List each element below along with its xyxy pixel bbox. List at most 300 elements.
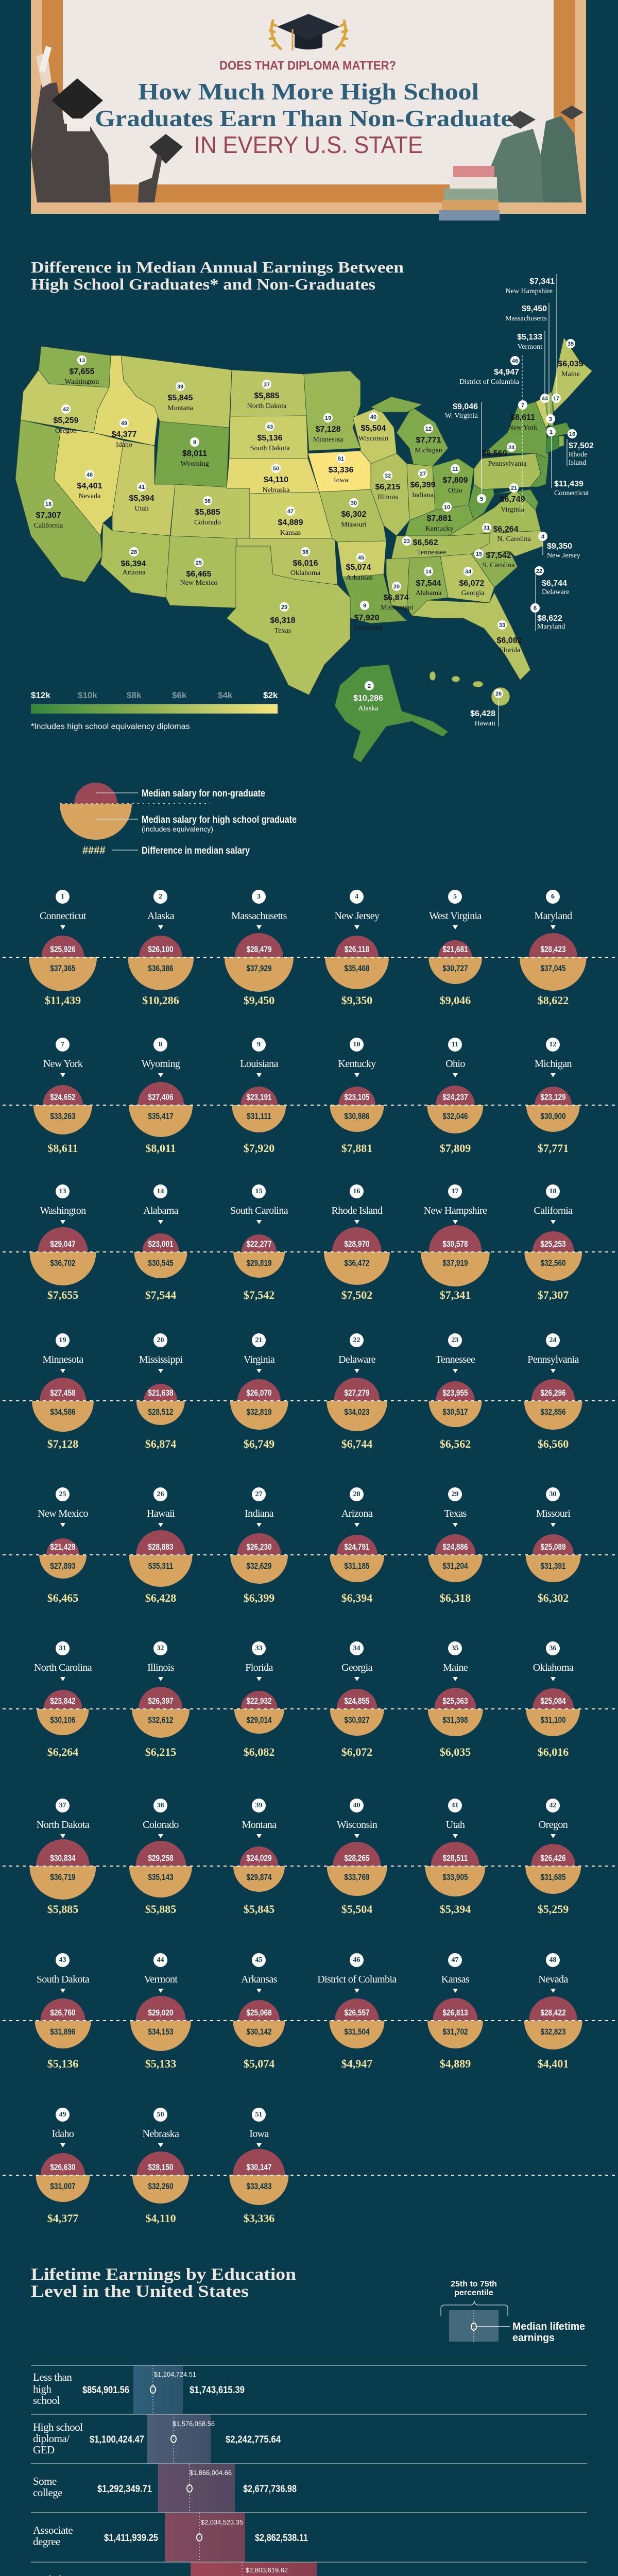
card: Maine: $6,035: [440, 1745, 471, 1758]
range value labels: $1,411,939.25: [104, 2533, 158, 2544]
state values and names on map: Louisiana: [354, 624, 383, 632]
card: Idaho: $26,630: [50, 2162, 76, 2172]
color scale legend: $12k: [31, 690, 50, 700]
map heading: High School Graduates* and Non-Graduates: [31, 275, 375, 293]
median value labels: $1,204,724.51: [154, 2370, 196, 2378]
state values and names on map: $4,110: [264, 476, 288, 484]
card: Delaware: 22: [353, 1336, 360, 1344]
card: Oklahoma: [504, 1637, 602, 1766]
card: Missouri: Missouri: [536, 1508, 570, 1519]
card: Louisiana: 9: [257, 1041, 261, 1048]
rank badges on map: 39: [177, 384, 183, 390]
education level row labels: school: [33, 2394, 60, 2406]
card: Connecticut: 1: [61, 893, 64, 901]
card: New Jersey: [325, 890, 389, 1007]
card: Pennsylvania: $32,856: [540, 1407, 566, 1417]
state values and names on map: Wisconsin: [358, 435, 388, 443]
rank badges on map: 47: [287, 509, 294, 515]
rank badges on map: 15: [476, 551, 482, 557]
card: Maine: [406, 1637, 504, 1766]
state values and names on map: $7,771: [416, 436, 441, 445]
card: Louisiana: $23,191: [246, 1092, 272, 1102]
card: West Virginia: $30,727: [442, 963, 468, 973]
card: Alaska: 2: [159, 893, 162, 901]
card: Washington: Washington: [40, 1205, 86, 1216]
median value labels: $1,576,058.56: [173, 2420, 215, 2428]
card: New York: $33,263: [50, 1111, 76, 1121]
card: Michigan: [526, 1038, 580, 1155]
card: South Carolina: 15: [255, 1188, 263, 1195]
rank badges on map: 12: [425, 426, 432, 432]
card: Michigan: $23,129: [540, 1092, 566, 1102]
state values and names on map: $6,215: [375, 483, 401, 492]
card: Iowa: $3,336: [244, 2212, 274, 2225]
rank badges on map: 14: [425, 569, 432, 575]
card: North Carolina: $23,842: [50, 1696, 76, 1706]
card: New Mexico: $6,465: [47, 1591, 78, 1604]
card: Maine: 35: [451, 1645, 458, 1652]
state values and names on map: $5,845: [168, 394, 193, 402]
card: Montana: Montana: [242, 1819, 276, 1831]
card: New Jersey: $26,118: [345, 944, 369, 954]
state values and names on map: $8,011: [182, 449, 207, 458]
rank badges on map: 16: [569, 431, 575, 437]
rank badges on map: 22: [536, 568, 542, 574]
rank badges on map: 50: [273, 466, 279, 472]
card: Louisiana: [232, 1038, 286, 1155]
card: Maryland: $8,622: [538, 994, 569, 1007]
card: Texas: $24,886: [442, 1542, 468, 1552]
card: Mississippi: $6,874: [145, 1437, 176, 1450]
card: Massachusetts: $37,929: [246, 963, 272, 973]
state values and names on map: $5,885: [254, 392, 280, 400]
state values and names on map: $8,611: [510, 413, 535, 422]
card: Wyoming: [129, 1038, 193, 1155]
card: Kentucky: $30,986: [344, 1111, 370, 1121]
card: Texas: 29: [451, 1490, 458, 1498]
state values and names on map: $7,920: [354, 614, 380, 622]
card: Indiana: Indiana: [245, 1508, 273, 1519]
card: Nevada: 48: [549, 1956, 556, 1964]
card: Iowa: [210, 2103, 308, 2232]
card: Wyoming: Wyoming: [142, 1058, 180, 1070]
card: Idaho: $4,377: [47, 2212, 78, 2225]
rank badges on map: 3: [549, 416, 552, 422]
card: Utah: Utah: [446, 1819, 465, 1831]
card: New York: $8,611: [47, 1142, 78, 1155]
card: Colorado: Colorado: [143, 1819, 179, 1831]
rank badges on map: 19: [325, 415, 331, 421]
rank badges on map: 29: [281, 604, 287, 611]
rank badges on map: 41: [139, 484, 145, 490]
median value labels: [154, 2370, 394, 2576]
map section: [15, 258, 594, 856]
card: Missouri: [525, 1487, 581, 1604]
card: New Mexico: 25: [59, 1490, 66, 1498]
card: Ohio: $24,237: [442, 1092, 468, 1102]
card: Delaware: $6,744: [341, 1437, 372, 1450]
card: Maryland: [519, 890, 587, 1007]
card: District of Columbia: $31,504: [344, 2027, 370, 2037]
card: California: California: [534, 1205, 573, 1216]
card: Tennessee: 23: [451, 1336, 458, 1344]
state values and names on map: $6,016: [293, 559, 318, 568]
card: Montana: [210, 1794, 308, 1923]
card: North Dakota: $5,885: [47, 1903, 78, 1916]
main title: How Much More High School: [138, 78, 479, 105]
rank badges on map: 45: [358, 555, 364, 561]
rank badges on map: 44: [542, 396, 548, 402]
card: California: $7,307: [538, 1289, 569, 1301]
color scale legend: [31, 690, 278, 714]
state values and names on map: Arizona: [122, 569, 146, 577]
state values and names on map: $5,394: [129, 494, 154, 503]
card: Colorado: $29,258: [148, 1853, 174, 1863]
card: Idaho: 49: [59, 2111, 66, 2119]
rank badges on map: 18: [45, 501, 52, 507]
card: South Carolina: [230, 1184, 288, 1301]
card: Delaware: [327, 1333, 387, 1450]
card: District of Columbia: $4,947: [341, 2057, 372, 2070]
state values and names on map: $7,881: [427, 514, 452, 523]
card: Arizona: [330, 1487, 384, 1604]
card: Florida: 33: [255, 1645, 263, 1652]
card: Idaho: [14, 2103, 112, 2232]
card: South Dakota: $31,896: [50, 2027, 76, 2037]
card: Arkansas: $5,074: [244, 2057, 274, 2070]
rank badges on map: 42: [63, 406, 69, 413]
state cards grid: row 5: [38, 1487, 581, 1604]
card: Vermont: $5,133: [145, 2057, 176, 2070]
card: California: $32,560: [540, 1258, 566, 1268]
card: Connecticut: $25,926: [50, 944, 76, 954]
card: Connecticut: Connecticut: [40, 910, 86, 922]
state values and names on map: N. Carolina: [497, 535, 531, 543]
card: Oklahoma: $6,016: [538, 1745, 569, 1758]
card: Missouri: $6,302: [538, 1591, 569, 1604]
card: Louisiana: Louisiana: [240, 1058, 278, 1070]
state values and names on map: $4,377: [112, 430, 137, 439]
card: Kentucky: [330, 1038, 384, 1155]
state values and names on map: Indiana: [412, 492, 434, 499]
state values and names on map: Illinois: [377, 494, 398, 501]
range value labels: $2,242,775.64: [226, 2434, 281, 2445]
card: Arizona: Arizona: [341, 1508, 372, 1519]
chart heading: Lifetime Earnings by Education: [31, 2265, 296, 2284]
card: Wyoming: 8: [159, 1041, 162, 1048]
card: District of Columbia: [308, 1948, 406, 2077]
card: North Dakota: $36,719: [50, 1872, 76, 1882]
state values and names on map: New York: [508, 424, 537, 432]
rank badges on map: 1: [550, 429, 553, 435]
card: Florida: $29,014: [246, 1715, 272, 1725]
callout labels: Alaska and small states: $10,286: [353, 694, 383, 703]
rank badges on map: 11: [452, 466, 458, 472]
card: Minnesota: $27,458: [50, 1388, 76, 1398]
callout leader lines: [482, 274, 567, 726]
state values and names on map: $6,264: [493, 525, 519, 534]
card: Colorado: 38: [157, 1802, 164, 1809]
card: North Carolina: $6,264: [47, 1745, 78, 1758]
card: Virginia: [230, 1333, 288, 1450]
state values and names on map: $6,874: [384, 594, 409, 602]
card: Washington: $29,047: [50, 1239, 76, 1249]
salary shape legend: (includes equivalency): [142, 825, 213, 833]
card: Indiana: $6,399: [244, 1591, 274, 1604]
card: Minnesota: $7,128: [47, 1437, 78, 1450]
salary shape legend: Median salary for high school graduate: [142, 815, 297, 825]
card: Texas: Texas: [444, 1508, 467, 1519]
state cards grid: row 8: [0, 1948, 618, 2077]
rank badges on map: 28: [131, 549, 137, 555]
rank badges on map: 9: [363, 603, 366, 609]
callout labels: Alaska and small states: Vermont: [518, 343, 542, 351]
rank badges on map: 13: [79, 358, 85, 364]
state values and names on map: Colorado: [194, 519, 221, 527]
card: California: $25,253: [540, 1239, 566, 1249]
callout labels: Alaska and small states: Connecticut: [554, 489, 589, 497]
card: South Dakota: South Dakota: [37, 1974, 89, 1985]
state values and names on map: $7,544: [416, 579, 441, 588]
callout labels: Alaska and small states: $9,450: [522, 304, 547, 313]
state cards grid: row 4: [32, 1333, 582, 1450]
card: Delaware: Delaware: [338, 1354, 375, 1365]
range value labels: $1,743,615.39: [190, 2385, 245, 2396]
card: Missouri: $31,391: [540, 1561, 566, 1571]
state values and names on map: [34, 360, 583, 654]
card: Ohio: [427, 1038, 483, 1155]
card: Rhode Island: $7,502: [341, 1289, 372, 1301]
salary shape legend: ####: [82, 845, 105, 856]
state values and names on map: New Mexico: [180, 579, 217, 587]
state cards grid: row 3: [30, 1184, 582, 1301]
state values and names on map: $5,504: [361, 424, 386, 433]
card: Mississippi: Mississippi: [139, 1354, 182, 1365]
card: Colorado: $5,885: [145, 1903, 176, 1916]
card: Massachusetts: Massachusetts: [231, 910, 287, 922]
state cards grid: row 6: [34, 1641, 580, 1758]
card: Georgia: Georgia: [341, 1662, 372, 1673]
callout labels: Alaska and small states: Maryland: [537, 623, 565, 631]
rank badges on map: 32: [385, 473, 391, 479]
rank badges on map: 40: [370, 414, 376, 420]
card: Virginia: Virginia: [244, 1354, 274, 1365]
choropleth map of US states: [15, 337, 592, 762]
card: Virginia: 21: [255, 1336, 263, 1344]
state values and names on map: Maine: [561, 370, 580, 378]
card: Illinois: $26,397: [148, 1696, 174, 1706]
education level row labels: Associate: [33, 2524, 73, 2536]
card: Hawaii: 26: [157, 1490, 164, 1498]
card: Maryland: $28,423: [540, 944, 566, 954]
card: Texas: $6,318: [440, 1591, 471, 1604]
card: Nebraska: $4,110: [145, 2212, 176, 2225]
card: Utah: 41: [451, 1802, 458, 1809]
state values and names on map: Michigan: [415, 447, 442, 454]
rank badges on map: 46: [512, 358, 518, 364]
card: Ohio: $7,809: [440, 1142, 471, 1155]
card: Hawaii: [129, 1487, 193, 1604]
callout labels: Alaska and small states: $9,046: [453, 402, 478, 411]
card: Washington: [30, 1184, 96, 1301]
card: West Virginia: $21,681: [442, 944, 468, 954]
card: Connecticut: [29, 890, 97, 1007]
card: Oklahoma: $25,084: [540, 1696, 566, 1706]
card: Pennsylvania: 24: [549, 1336, 556, 1344]
card: Montana: $29,874: [246, 1872, 272, 1882]
card: Oklahoma: Oklahoma: [533, 1662, 573, 1673]
card: Hawaii: $35,311: [148, 1561, 173, 1571]
card: District of Columbia: 46: [353, 1956, 360, 1964]
card: Iowa: Iowa: [249, 2128, 269, 2140]
card: Nevada: $32,823: [540, 2027, 566, 2037]
card: Wyoming: $27,406: [148, 1092, 174, 1102]
card: Massachusetts: [225, 890, 294, 1007]
card: Idaho: Idaho: [52, 2128, 74, 2140]
card: Minnesota: [32, 1333, 94, 1450]
range value labels: $1,292,349.71: [97, 2484, 152, 2495]
card: Mississippi: [136, 1333, 185, 1450]
card: Texas: $31,204: [442, 1561, 468, 1571]
state values and names on map: Missouri: [341, 521, 367, 529]
state values and names on map: $6,035: [558, 360, 583, 368]
card: Rhode Island: Rhode Island: [332, 1205, 382, 1216]
state cards grid: row 2: [33, 1038, 580, 1155]
state values and names on map: Mississippi: [381, 604, 414, 612]
card: Montana: 39: [255, 1802, 263, 1809]
card: Tennessee: $30,517: [442, 1407, 468, 1417]
card: Nebraska: $32,260: [148, 2181, 174, 2191]
state values and names on map: $4,889: [278, 518, 303, 527]
state values and names on map: Tennessee: [417, 549, 447, 556]
card: Hawaii: $6,428: [145, 1591, 176, 1604]
rank badges on map: 2: [368, 683, 371, 689]
card: Oregon: [504, 1794, 602, 1923]
state values and names on map: $5,885: [195, 508, 220, 517]
card: Delaware: $27,279: [344, 1388, 370, 1398]
rank badges on map: 7: [521, 402, 524, 409]
card: Kentucky: Kentucky: [338, 1058, 375, 1070]
state values and names on map: North Dakota: [247, 402, 287, 410]
card: Minnesota: $34,586: [50, 1407, 76, 1417]
rank badges on map: 34: [465, 569, 472, 575]
card: Iowa: $33,483: [246, 2181, 272, 2191]
card: Nevada: $28,422: [540, 2008, 566, 2018]
state values and names on map: Alabama: [416, 589, 442, 597]
card: West Virginia: $9,046: [440, 994, 471, 1007]
card: Oklahoma: $31,100: [540, 1715, 566, 1725]
callout labels: Alaska and small states: [353, 277, 594, 727]
rank badges on map: 17: [553, 396, 559, 402]
rank badges on map: 23: [404, 538, 410, 545]
state values and names on map: $7,542: [486, 551, 511, 560]
card: Nevada: [504, 1948, 602, 2077]
range value labels: $2,862,538.11: [255, 2533, 308, 2544]
card: New Hampshire: $7,341: [440, 1289, 471, 1301]
card: Alabama: 14: [157, 1188, 164, 1195]
card: Nebraska: 50: [157, 2111, 164, 2119]
card: New Mexico: New Mexico: [38, 1508, 88, 1519]
card: Arizona: $31,185: [344, 1561, 370, 1571]
card: Illinois: $6,215: [145, 1745, 176, 1758]
card: Indiana: $32,629: [246, 1561, 272, 1571]
rank badges on map: 25: [196, 560, 202, 566]
education level row labels: Some: [33, 2475, 57, 2487]
card: New Mexico: $27,893: [50, 1561, 76, 1571]
card: Wyoming: $8,011: [145, 1142, 176, 1155]
chart legend: percentile box: [441, 2280, 585, 2344]
card: Louisiana: $7,920: [244, 1142, 274, 1155]
state values and names on map: $6,302: [341, 510, 367, 519]
card: New York: [33, 1038, 92, 1155]
rank badges on map: 20: [393, 584, 400, 590]
card: Oregon: 42: [549, 1802, 556, 1809]
chart legend: percentile box: earnings: [512, 2332, 555, 2344]
card: Ohio: $32,046: [442, 1111, 468, 1121]
map heading: Difference in Median Annual Earnings Between: [31, 258, 404, 276]
callout labels: Alaska and small states: $8,622: [537, 614, 562, 623]
rank badges on map: 38: [204, 498, 211, 504]
card: Kentucky: 10: [353, 1041, 360, 1048]
rank badges on map: 8: [193, 439, 196, 446]
card: Indiana: $26,230: [246, 1542, 272, 1552]
card: California: [524, 1184, 582, 1301]
chart heading: Level in the United States: [31, 2282, 249, 2301]
callout labels: Alaska and small states: $6,744: [542, 579, 567, 588]
card: Vermont: [112, 1948, 210, 2077]
color scale legend: $8k: [127, 690, 142, 700]
card: South Carolina: $7,542: [244, 1289, 274, 1301]
card: Georgia: $6,072: [341, 1745, 372, 1758]
state values and names on map: Ohio: [448, 487, 462, 495]
card: North Carolina: 31: [59, 1645, 66, 1652]
rank badges on map: 10: [444, 504, 450, 511]
state values and names on map: $6,318: [270, 616, 296, 625]
card: Pennsylvania: [524, 1333, 582, 1450]
card: Maine: $25,363: [442, 1696, 468, 1706]
state values and names on map: Utah: [134, 505, 149, 513]
card: Massachusetts: 3: [257, 893, 261, 901]
card: Montana: $24,029: [246, 1853, 272, 1863]
card: Kentucky: $23,105: [344, 1092, 370, 1102]
card: Kansas: Kansas: [441, 1974, 469, 1985]
state values and names on map: $7,655: [70, 367, 95, 376]
card: Wisconsin: $5,504: [341, 1903, 372, 1916]
card: Florida: $22,932: [246, 1696, 272, 1706]
state values and names on map: Virginia: [501, 506, 525, 514]
callout labels: Alaska and small states: $4,947: [494, 368, 519, 377]
card: Illinois: [132, 1641, 190, 1758]
rank badges on map: 21: [511, 485, 517, 492]
card: Alabama: $23,001: [148, 1239, 174, 1249]
state values and names on map: Washington: [65, 378, 99, 386]
state values and names on map: Oregon: [55, 427, 77, 435]
card: Michigan: 12: [549, 1041, 556, 1048]
card: Kansas: $31,702: [442, 2027, 468, 2037]
illustration: left graduate: [31, 46, 183, 202]
card: New York: $24,652: [50, 1092, 76, 1102]
rank badges on map: 49: [121, 420, 127, 427]
card: New York: New York: [43, 1058, 82, 1070]
card: Pennsylvania: Pennsylvania: [527, 1354, 579, 1365]
card: Minnesota: 19: [59, 1336, 66, 1344]
callout labels: Alaska and small states: Rhode: [569, 451, 588, 459]
rank badges on map: 48: [87, 472, 93, 478]
card: Florida: Florida: [245, 1662, 273, 1673]
state cards grid: row 1: [29, 890, 587, 1007]
card: Connecticut: $11,439: [45, 994, 81, 1007]
card: Missouri: $25,089: [540, 1542, 566, 1552]
